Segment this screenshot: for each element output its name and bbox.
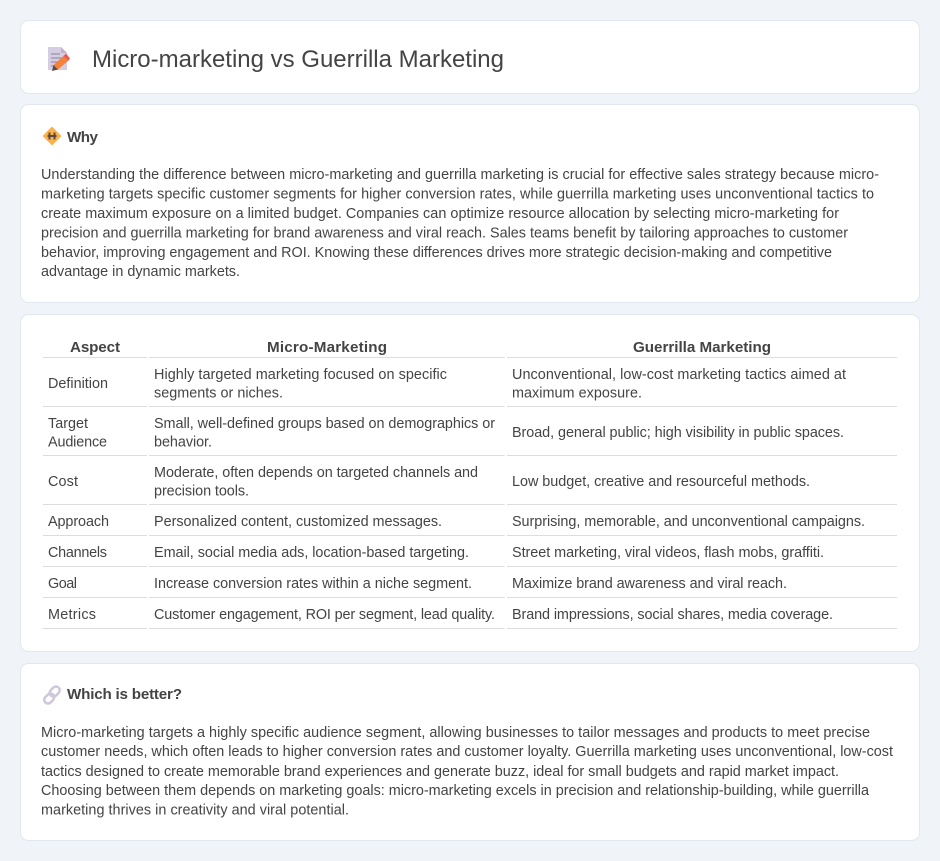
- text block: which is better paragraph: [41, 725, 893, 818]
- row: definition: Definition: [48, 376, 108, 392]
- row: metrics: [48, 607, 833, 623]
- text block: why paragraph: behavior, improving engagement and ROI. Knowing these differences drives more strategic decision-making and competitive: [41, 245, 832, 261]
- text block: which is better paragraph: marketing thrives in creativity and viral potential.: [41, 802, 349, 818]
- panel: which is better: [20, 664, 920, 840]
- row: cost: Cost: [48, 474, 78, 490]
- table header row: Micro-Marketing: [267, 339, 387, 356]
- text block: which is better paragraph: Choosing between them depends on marketing goals: micro-marketing excels in precision and relationship-building, while guerrilla: [41, 783, 869, 799]
- heading: which is better: Which is better?: [67, 686, 182, 703]
- panel: why: [20, 104, 920, 302]
- text block: which is better paragraph: Micro-marketing targets a highly specific audience segment, allowing businesses to tailor messages and products to meet precise: [41, 725, 870, 741]
- row: channels: Channels: [48, 545, 107, 561]
- row: goal: Increase conversion rates within a niche segment.: [154, 576, 472, 592]
- row: approach: Surprising, memorable, and unconventional campaigns.: [512, 514, 865, 530]
- row: definition: Unconventional, low-cost marketing tactics aimed at: [512, 367, 846, 383]
- row: approach: Personalized content, customized messages.: [154, 514, 442, 530]
- table header row: [70, 339, 771, 356]
- row: cost: precision tools.: [154, 484, 249, 500]
- row: goal: Maximize brand awareness and viral reach.: [512, 576, 787, 592]
- row: definition: segments or niches.: [154, 386, 283, 402]
- row: metrics: Metrics: [48, 607, 96, 623]
- panel: comparison table: [20, 314, 920, 652]
- row: definition: [48, 367, 846, 402]
- row: cost: Low budget, creative and resourceful methods.: [512, 474, 810, 490]
- icon: document with pencil: [48, 47, 70, 71]
- row: cost: Moderate, often depends on targeted channels and: [154, 465, 478, 481]
- row: definition: maximum exposure.: [512, 386, 642, 402]
- row: channels: Email, social media ads, location-based targeting.: [154, 545, 469, 561]
- text block: why paragraph: create maximum exposure on a limited budget. Companies can optimize resource allocation by selecting micro-marketing for: [41, 206, 839, 222]
- text block: which is better paragraph: tactics designed to create memorable brand experiences and generate buzz, ideal for small budgets and rapid market impact.: [41, 764, 839, 780]
- row: target audience: Broad, general public; high visibility in public spaces.: [512, 425, 844, 441]
- row: approach: [48, 514, 865, 530]
- title: Micro-marketing vs Guerrilla Marketing: [92, 46, 504, 73]
- row: approach: Approach: [48, 514, 109, 530]
- row: target audience: [48, 416, 844, 450]
- table header row: Aspect: [70, 339, 120, 356]
- row: target audience: Audience: [48, 434, 107, 450]
- row: target audience: behavior.: [154, 434, 212, 450]
- text block: why paragraph: marketing targets specific customer segments for higher conversion rates, while guerrilla marketing uses unconventional tactics to: [41, 186, 874, 202]
- table header row: Guerrilla Marketing: [633, 339, 771, 356]
- row: definition: Highly targeted marketing focused on specific: [154, 367, 447, 383]
- row: target audience: Target: [48, 416, 88, 432]
- text block: why paragraph: advantage in dynamic markets.: [41, 264, 240, 280]
- text block: which is better paragraph: customer needs, which often leads to higher conversion rates and customer loyalty. Guerrilla marketing uses unconventional, low-cost: [41, 744, 893, 760]
- row: cost: [48, 465, 810, 500]
- icon: warning diamond: [44, 128, 60, 144]
- text block: why paragraph: precision and guerrilla marketing for brand awareness and viral reach. Sales teams benefit by tailoring approaches to customer: [41, 226, 848, 242]
- row: metrics: Customer engagement, ROI per segment, lead quality.: [154, 607, 495, 623]
- row: metrics: Brand impressions, social shares, media coverage.: [512, 607, 833, 623]
- heading: why: Why: [67, 129, 99, 146]
- row: channels: [48, 545, 824, 561]
- text block: why paragraph: [41, 167, 879, 280]
- row: channels: Street marketing, viral videos, flash mobs, graffiti.: [512, 545, 824, 561]
- icon: chain link: [43, 685, 61, 705]
- text block: why paragraph: Understanding the difference between micro-marketing and guerrilla marketing is crucial for effective sales strategy because micro-: [41, 167, 879, 183]
- row: goal: Goal: [48, 576, 77, 592]
- row: goal: [48, 576, 787, 592]
- panel: title header: [20, 20, 920, 94]
- row: target audience: Small, well-defined groups based on demographics or: [154, 416, 495, 432]
